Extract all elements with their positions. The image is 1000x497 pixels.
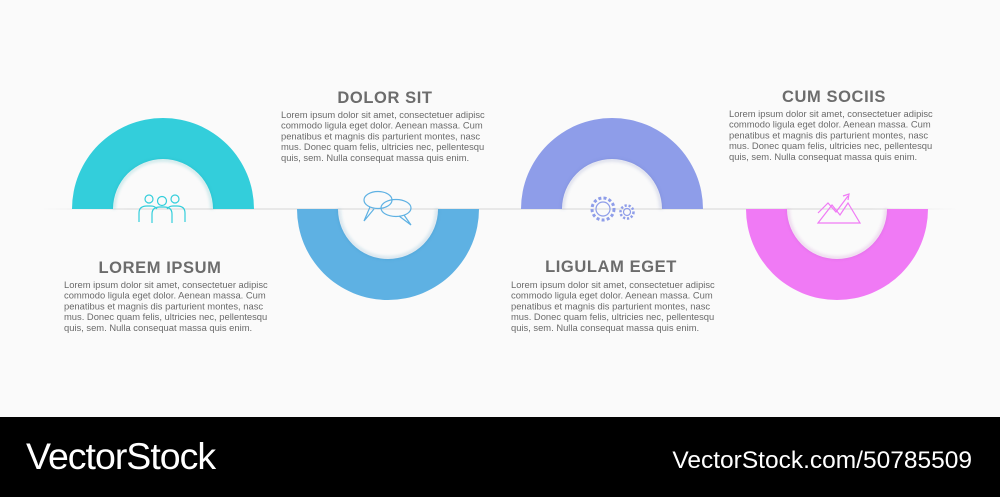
text block 2: penatibus et magnis dis parturient montes, nasc [281, 130, 480, 141]
text block 4: penatibus et magnis dis parturient montes, nasc [729, 129, 928, 140]
text block 4: Lorem ipsum dolor sit amet, consectetuer adipisc [729, 108, 933, 119]
icon: chat bubbles [364, 192, 411, 225]
arc 4: pink [746, 209, 928, 300]
text block 3: penatibus et magnis dis parturient montes, nasc [511, 300, 710, 311]
text block 3: mus. Donec quam felis, ultricies nec, pellentesqu [511, 311, 714, 322]
heading: CUM SOCIIS: CUM SOCIIS [782, 88, 886, 106]
icon: chart mountain [818, 194, 860, 223]
text block 1: Lorem ipsum dolor sit amet, consectetuer adipisc [64, 279, 268, 290]
footer bar: VectorStock [26, 435, 216, 477]
text block 2: Lorem ipsum dolor sit amet, consectetuer adipisc [281, 109, 485, 120]
text block 2: commodo ligula eget dolor. Aenean massa. Cum [281, 120, 483, 131]
text block 1: quis, sem. Nulla consequat massa quis enim. [64, 322, 252, 333]
text block 3: commodo ligula eget dolor. Aenean massa. Cum [511, 290, 713, 301]
heading: LIGULAM EGET: LIGULAM EGET [545, 258, 677, 276]
text block 1: commodo ligula eget dolor. Aenean massa. Cum [64, 290, 266, 301]
text block 2: mus. Donec quam felis, ultricies nec, pellentesqu [281, 141, 484, 152]
arc 1: cyan [72, 118, 254, 209]
arc 2: blue [297, 209, 479, 300]
footer bar [0, 417, 1000, 497]
footer bar: VectorStock.com/50785509 [672, 447, 972, 474]
text block 3: Lorem ipsum dolor sit amet, consectetuer adipisc [511, 279, 715, 290]
heading: DOLOR SIT: DOLOR SIT [337, 89, 433, 107]
icon: gears [592, 198, 634, 220]
text block 2: quis, sem. Nulla consequat massa quis enim. [281, 152, 469, 163]
text block 1: penatibus et magnis dis parturient montes, nasc [64, 300, 263, 311]
text block 4: commodo ligula eget dolor. Aenean massa. Cum [729, 119, 931, 130]
arc 3: periwinkle [521, 118, 703, 209]
heading: LOREM IPSUM: LOREM IPSUM [98, 259, 222, 277]
text block 4: quis, sem. Nulla consequat massa quis enim. [729, 151, 917, 162]
text block 1: mus. Donec quam felis, ultricies nec, pellentesqu [64, 311, 267, 322]
icon: people [139, 195, 185, 223]
text block 4: mus. Donec quam felis, ultricies nec, pellentesqu [729, 140, 932, 151]
text block 3: quis, sem. Nulla consequat massa quis enim. [511, 322, 699, 333]
